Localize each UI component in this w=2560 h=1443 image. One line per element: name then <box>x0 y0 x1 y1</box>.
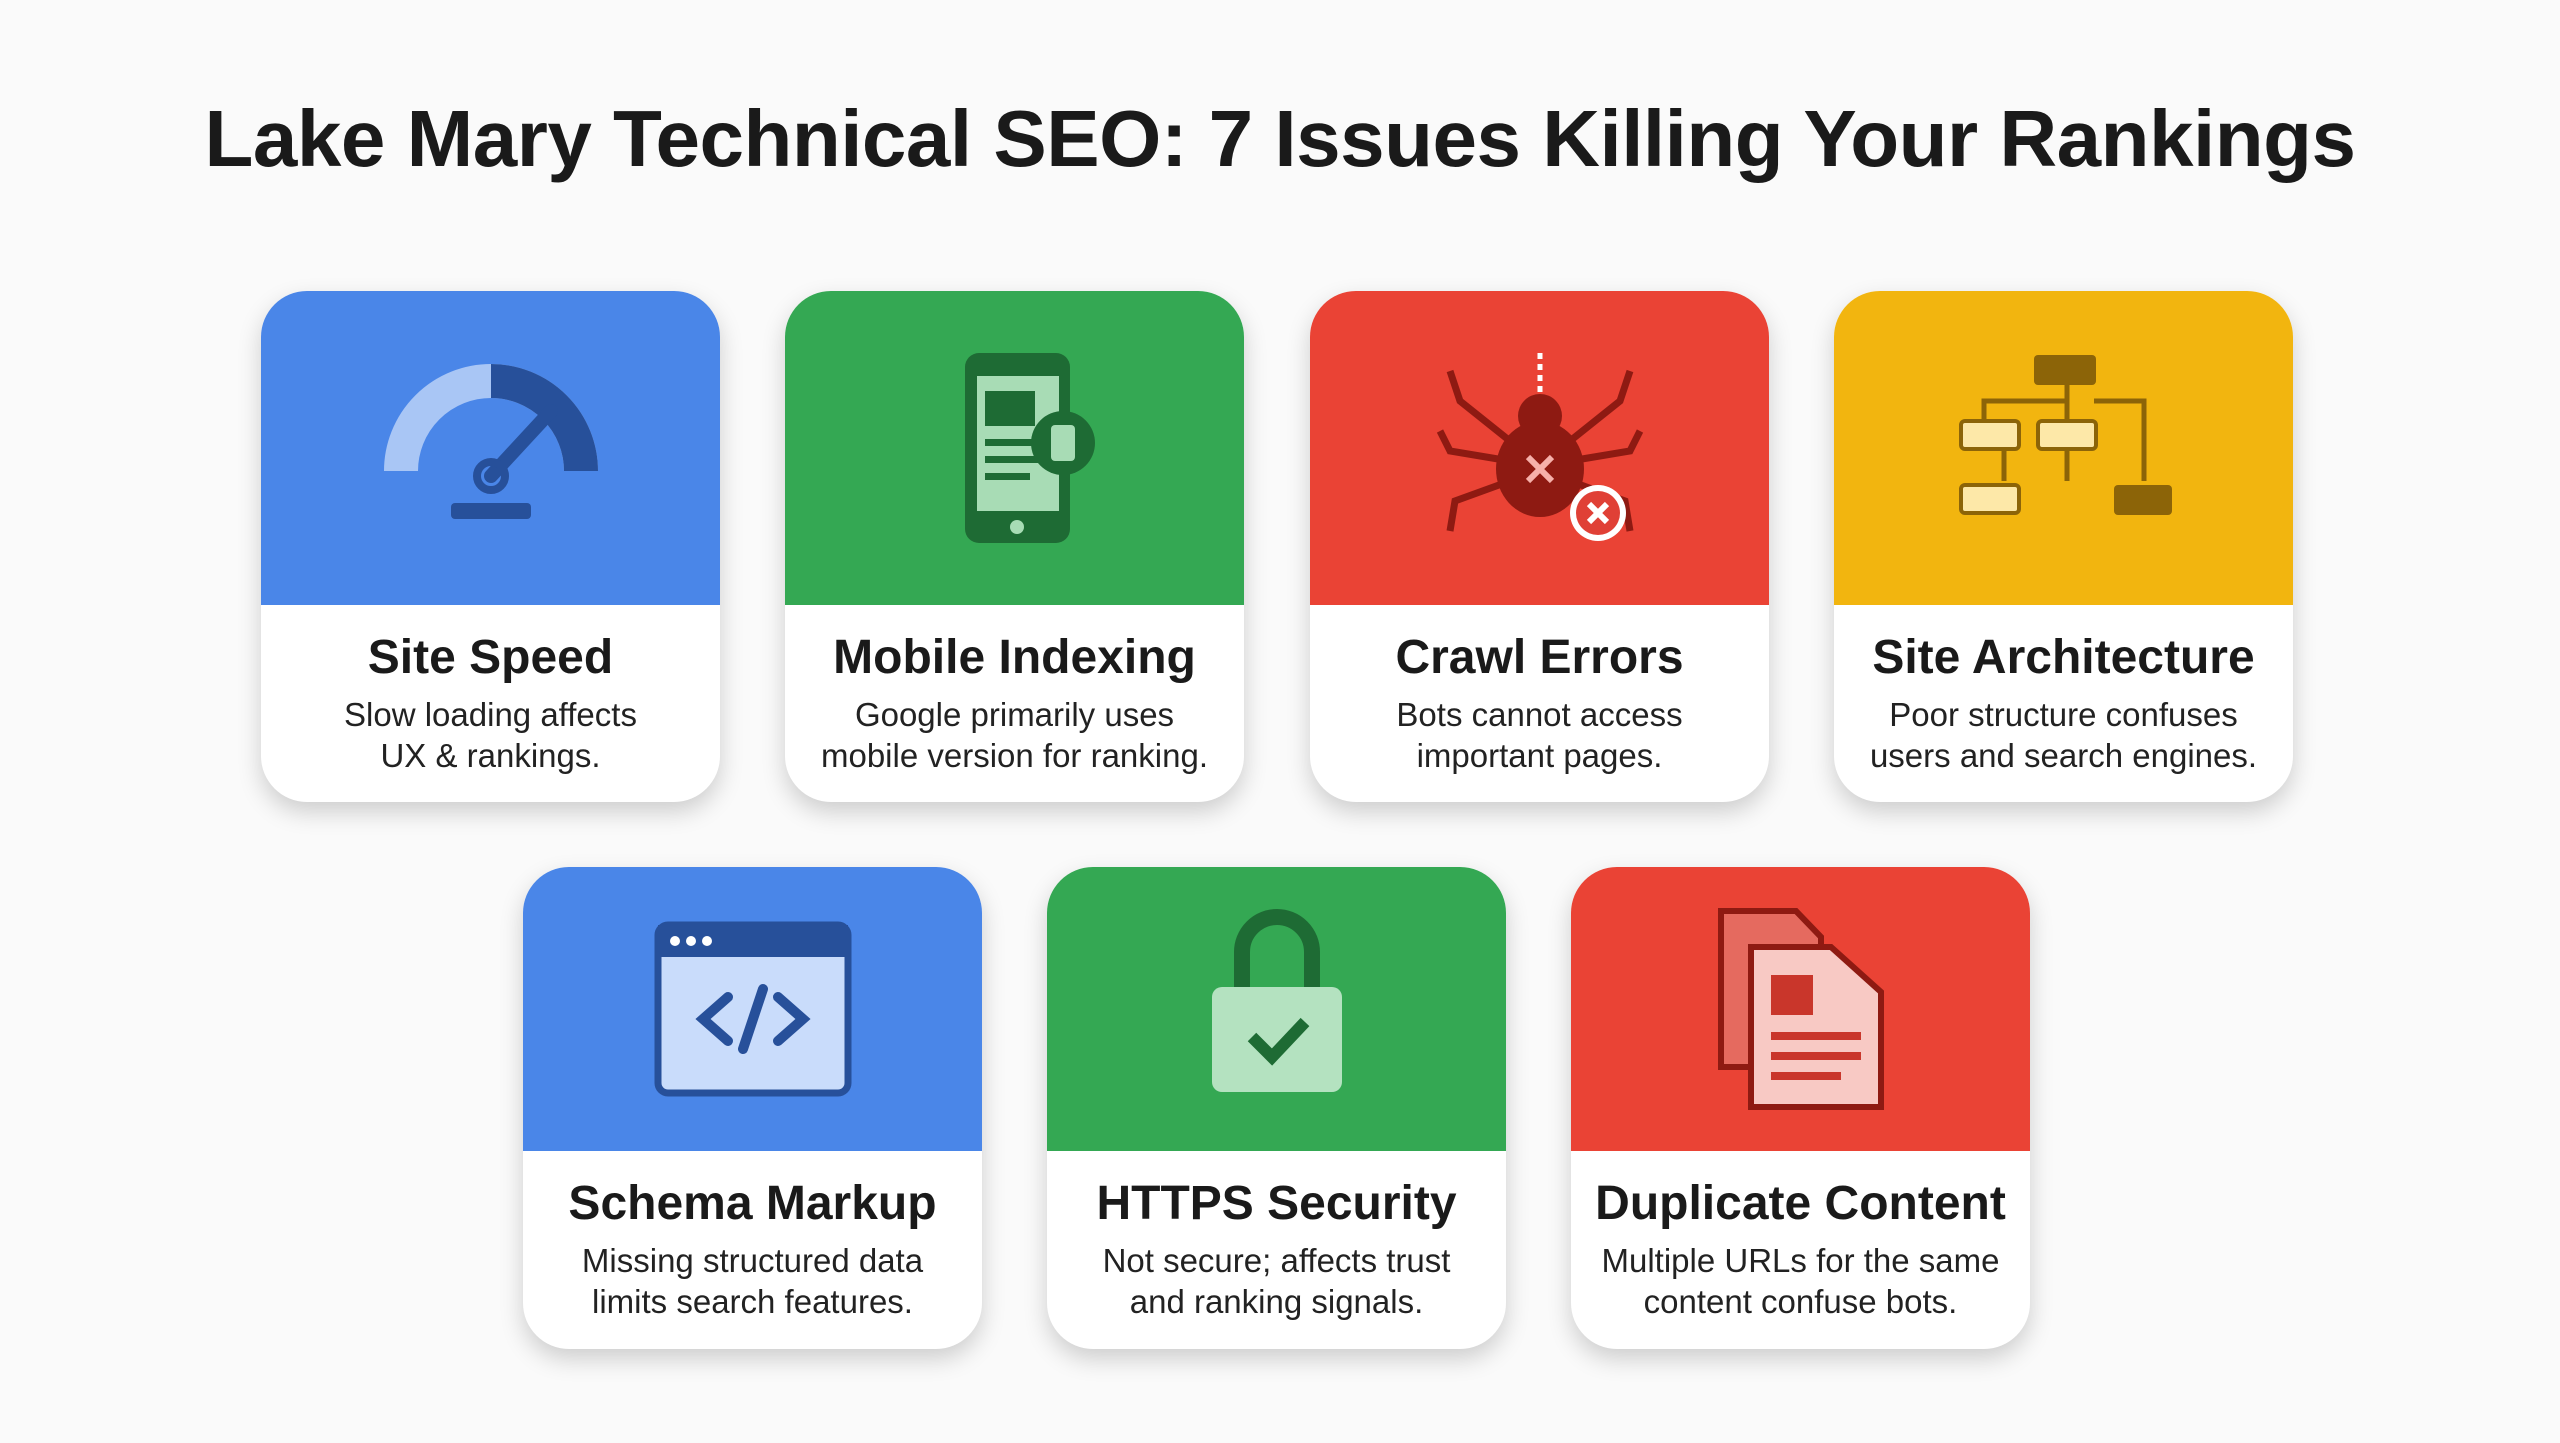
icon: speedometer <box>261 291 720 605</box>
heading: Mobile Indexing <box>833 631 1196 684</box>
icon: padlock <box>1047 867 1506 1151</box>
icon: documents <box>1571 867 2030 1151</box>
card: duplicate content <box>1571 867 2030 1349</box>
card: crawl errors <box>1310 291 1769 802</box>
description: content confuse bots. <box>1644 1283 1957 1320</box>
icon: code window <box>523 867 982 1151</box>
card: https security <box>1047 867 1506 1349</box>
heading: Site Architecture <box>1872 631 2255 684</box>
description <box>344 696 637 774</box>
card: site architecture <box>1834 291 2293 802</box>
icon: sitemap <box>1834 291 2293 605</box>
description: Missing structured data <box>582 1242 923 1279</box>
heading: Crawl Errors <box>1395 631 1684 684</box>
title: Lake Mary Technical SEO: 7 Issues Killing Your Rankings <box>204 94 2355 183</box>
icon: bug <box>1310 291 1769 605</box>
description: Not secure; affects trust <box>1103 1242 1450 1279</box>
description: Poor structure confuses <box>1889 696 2238 733</box>
description: Bots cannot access <box>1396 696 1683 733</box>
description: Slow loading affects <box>344 696 637 733</box>
description: Google primarily uses <box>855 696 1174 733</box>
description: and ranking signals. <box>1130 1283 1423 1320</box>
icon: phone <box>785 291 1244 605</box>
description: important pages. <box>1417 737 1662 774</box>
card: schema markup <box>523 867 982 1349</box>
description: users and search engines. <box>1870 737 2257 774</box>
description <box>1870 696 2257 774</box>
description <box>582 1242 924 1320</box>
description <box>821 696 1208 774</box>
description <box>1396 696 1683 774</box>
heading: Site Speed <box>368 631 613 684</box>
heading: Schema Markup <box>568 1177 937 1230</box>
heading: HTTPS Security <box>1096 1177 1457 1230</box>
heading: Duplicate Content <box>1595 1177 2006 1230</box>
description: mobile version for ranking. <box>821 737 1208 774</box>
description <box>1103 1242 1450 1320</box>
description: Multiple URLs for the same <box>1602 1242 1999 1279</box>
description: limits search features. <box>592 1283 913 1320</box>
card: site speed <box>261 291 720 802</box>
description <box>1602 1242 1999 1320</box>
card: mobile indexing <box>785 291 1244 802</box>
description: UX & rankings. <box>380 737 601 774</box>
